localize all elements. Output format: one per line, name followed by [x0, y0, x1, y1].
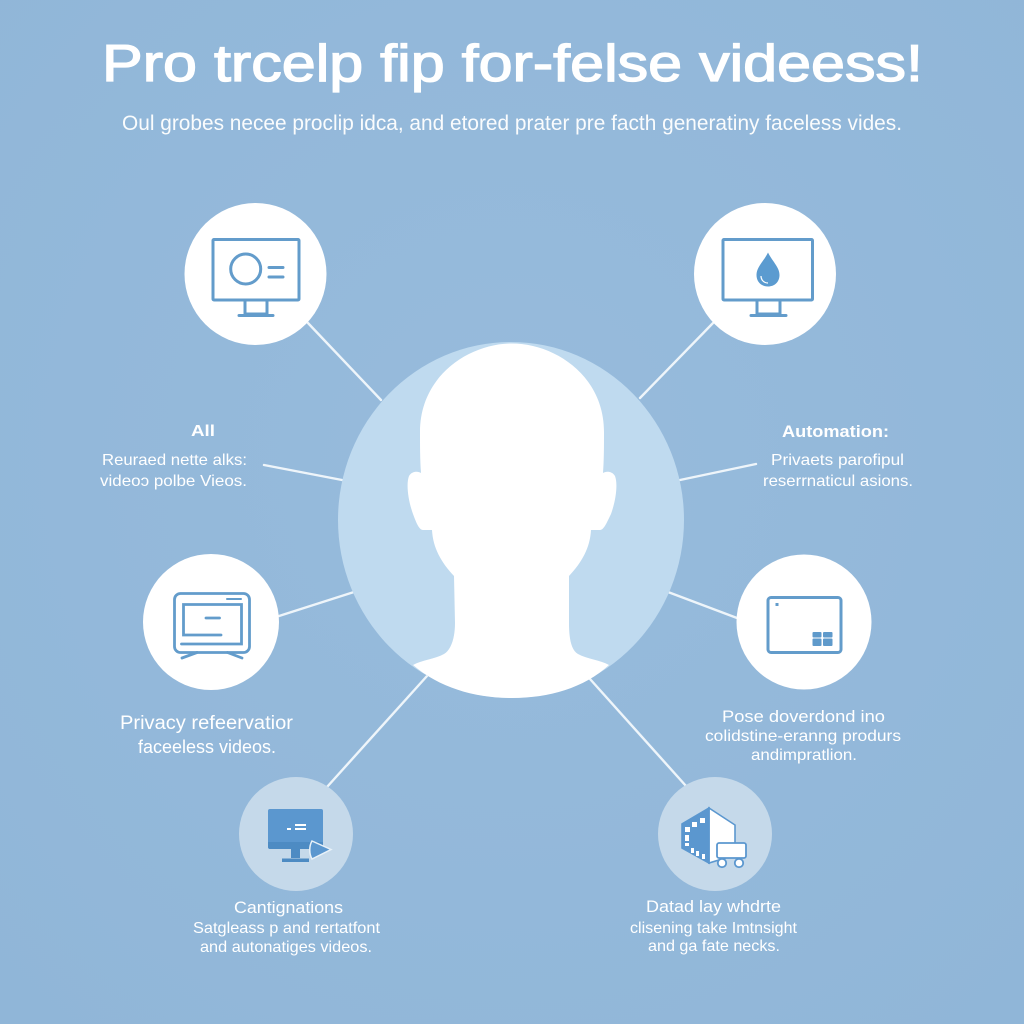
- subtitle: Oul grobes necee proclip idca, and etored prater pre facth generatiny faceless vides.: [122, 112, 902, 135]
- label: Automation: [763, 423, 913, 490]
- label: Cantignations: [193, 899, 381, 956]
- label: Datad: Datad lay whdrte: [646, 897, 781, 916]
- label: Privacy: Privacy refeervatior: [120, 713, 294, 734]
- icon circle: monitor with circle: [184, 203, 326, 345]
- label: Privacy: faceeless videos.: [138, 737, 276, 757]
- label: All: videoɔ polbe Vieos.: [100, 473, 247, 490]
- icon circle: screen on feet: [143, 554, 279, 690]
- label: Datad: [630, 897, 798, 955]
- icon circle: monitor with play: [239, 777, 353, 891]
- title: Pro trcelp fip for-felse videess!: [102, 35, 923, 93]
- label: Automation: Automation:: [782, 423, 889, 441]
- label: Cantignations: Satgleass p and rertatfont: [193, 920, 381, 937]
- label: Pose: andimpratlion.: [751, 747, 857, 764]
- label: Privacy: [120, 713, 294, 757]
- label: Cantignations: Cantignations: [234, 899, 343, 917]
- label: Pose: Pose doverdond ino: [722, 707, 885, 726]
- label: All: All: [191, 423, 215, 440]
- label: Pose: colidstine-eranng produrs: [705, 728, 901, 745]
- label: Automation: reserrnaticul asions.: [763, 473, 913, 490]
- icon circle: monitor with water drop: [694, 203, 836, 345]
- label: All: Reuraed nette alks:: [102, 452, 247, 469]
- icon circle: window with grid: [736, 554, 872, 690]
- connector lines: [264, 322, 756, 787]
- label: All: [100, 423, 247, 490]
- central faceless head: [338, 342, 684, 698]
- icon circle: building and cart: [658, 777, 772, 891]
- label: Datad: and ga fate necks.: [648, 938, 780, 955]
- label: Automation: Privaets parofipul: [771, 452, 904, 469]
- label: Datad: clisening take Imtnsight: [630, 920, 798, 937]
- label: Cantignations: and autonatiges videos.: [200, 939, 372, 956]
- label: Pose: [705, 707, 901, 764]
